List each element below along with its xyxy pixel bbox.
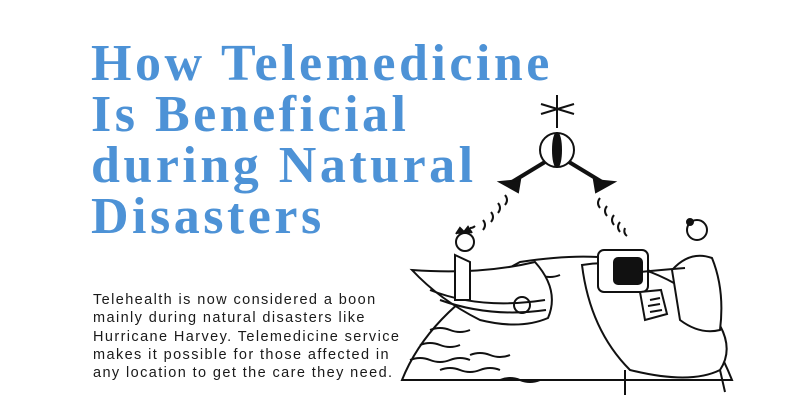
body text: mainly during natural disasters like <box>93 310 366 326</box>
water and table <box>402 257 732 395</box>
icon: doctor <box>640 219 721 331</box>
body text: makes it possible for those affected in <box>93 347 390 363</box>
body text: Hurricane Harvey. Telemedicine service <box>93 329 400 345</box>
title <box>91 35 553 245</box>
icon: satellite <box>500 95 614 192</box>
body text: Telehealth is now considered a boon <box>93 292 377 308</box>
title: Disasters <box>91 188 325 245</box>
title: during Natural <box>91 137 477 194</box>
icon: boat with man <box>412 227 552 325</box>
title: How Telemedicine <box>91 35 553 92</box>
signal waves <box>470 195 627 236</box>
body text: any location to get the care they need. <box>93 365 393 381</box>
title: Is Beneficial <box>91 86 409 143</box>
body text <box>93 292 400 381</box>
icon: computer <box>598 250 667 320</box>
